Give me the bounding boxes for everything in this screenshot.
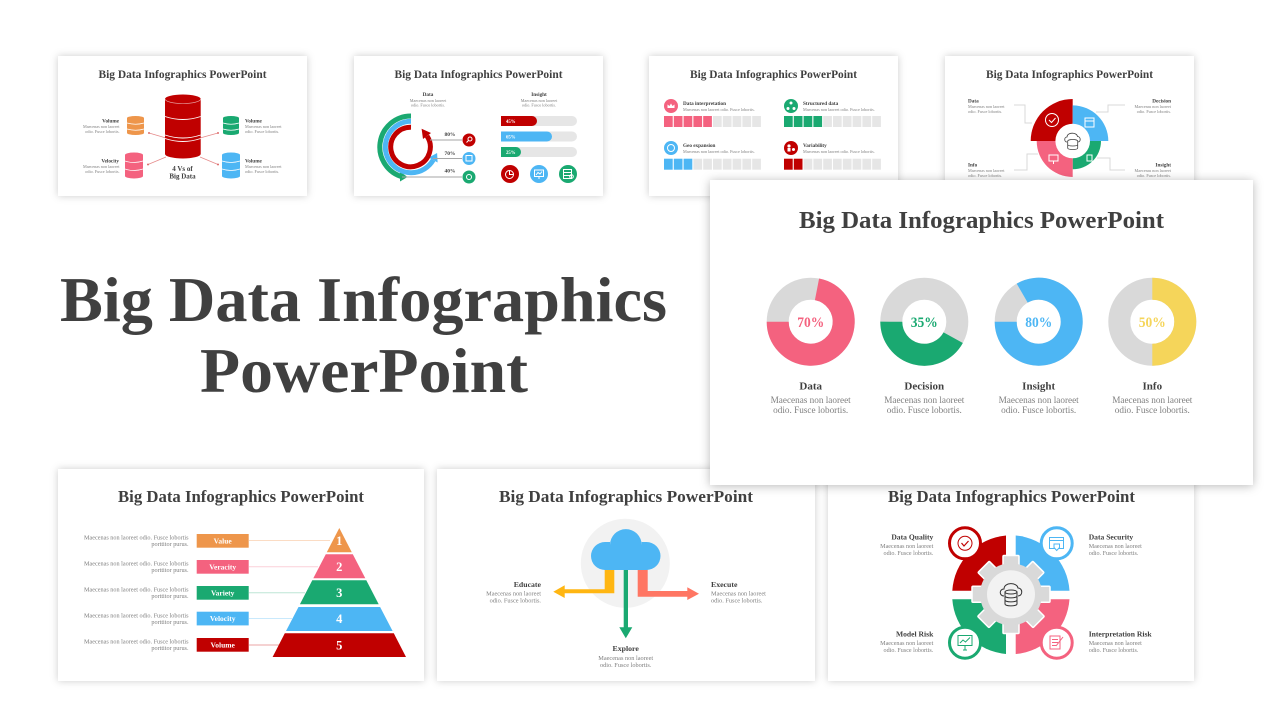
arrow: explore: [619, 569, 632, 638]
label: info: Info: [1143, 380, 1163, 392]
donut: data 70%: 70%: [797, 315, 824, 331]
block item: structured data: [784, 99, 881, 127]
data heading: Maecenas non laoreet: [410, 98, 447, 103]
label: decision: odio. Fusce lobortis.: [887, 405, 962, 415]
insight heading: Insight: [531, 92, 547, 98]
label: model risk: Maecenas non laoreet: [880, 641, 934, 647]
gear with data icon: [972, 556, 1050, 634]
percent labels: [444, 132, 456, 174]
label: info: odio. Fusce lobortis.: [968, 173, 1002, 178]
label: decision: [1134, 98, 1172, 114]
ring chart arrows: [380, 116, 462, 182]
icon: window circle: [462, 152, 476, 165]
block item: variability: [784, 141, 881, 170]
icon: cloud: [591, 529, 660, 570]
label: info: [1112, 380, 1193, 415]
label: volume right bottom: odio. Fusce lobortis.: [245, 169, 279, 174]
green small cylinder: [223, 116, 239, 135]
pyramid label chips: Veracity: [209, 562, 236, 572]
label: volume left: odio. Fusce lobortis.: [85, 129, 120, 134]
blue small cylinder: [222, 152, 240, 178]
panel title: gear: Big Data Infographics PowerPoint: [888, 487, 1136, 506]
donut: info 50%: [1119, 289, 1185, 355]
label: explore: [598, 644, 653, 669]
pyramid: 5: [336, 639, 342, 653]
label: info: Maecenas non laoreet: [968, 168, 1005, 173]
insight heading: Maecenas non laoreet: [521, 98, 558, 103]
icon: search circle: [462, 134, 476, 146]
pyramid: 1: [336, 534, 342, 548]
data heading: odio. Fusce lobortis.: [411, 102, 445, 108]
label: info: [968, 162, 1005, 178]
donut: data 70%: [778, 289, 844, 355]
icon: security window: [1041, 528, 1072, 559]
label: info: odio. Fusce lobortis.: [1115, 405, 1190, 415]
pyramid: 3: [336, 586, 342, 600]
data heading: [410, 92, 447, 108]
pyramid label chips: Value: [214, 536, 232, 546]
label: interpretation risk: [1089, 630, 1152, 654]
label: insight: [1134, 162, 1172, 178]
label: volume left: Maecenas non laoreet: [83, 124, 120, 129]
label: educate: Educate: [514, 580, 542, 589]
quadrant: red: [952, 536, 1006, 591]
label: interpretation risk: odio. Fusce lobortis.: [1089, 648, 1139, 654]
panel title: 4 Vs: Big Data Infographics PowerPoint: [98, 69, 267, 81]
panel title: blocks: Big Data Infographics PowerPoint: [690, 69, 857, 81]
pyramid descriptions: Maecenas non laoreet odio. Fusce lobortis: [84, 638, 189, 646]
label: volume right bottom: Volume: [245, 158, 263, 164]
label: data: Data: [799, 380, 823, 392]
icon: interpretation document: [1041, 627, 1072, 658]
label: execute: [711, 580, 766, 604]
label: velocity: Maecenas non laoreet: [83, 164, 120, 169]
label: explore: Explore: [613, 644, 639, 653]
panel: gear quadrants: [828, 469, 1194, 681]
donut: decision 35%: 35%: [911, 315, 938, 331]
label: insight: [999, 380, 1079, 415]
label: decision: Decision: [904, 380, 944, 392]
insight heading: odio. Fusce lobortis.: [522, 102, 556, 108]
label: educate: Maecenas non laoreet: [486, 590, 541, 598]
label: data: odio. Fusce lobortis.: [968, 109, 1002, 114]
icon: data circle: [462, 170, 476, 184]
pyramid descriptions: Maecenas non laoreet odio. Fusce lobortis: [84, 560, 189, 568]
panel: rings and bars: [354, 56, 603, 196]
pyramid label chips: Velocity: [210, 614, 236, 623]
quadrant wheel: [1031, 99, 1108, 177]
label: model risk: [880, 630, 934, 654]
orange small cylinder: [127, 116, 144, 135]
arrow: educate: [553, 569, 614, 598]
pyramid descriptions: porttitor purus.: [151, 645, 189, 652]
panel title: pyramid: Big Data Infographics PowerPoint: [118, 487, 365, 506]
label: insight: Maecenas non laoreet: [1134, 168, 1172, 173]
label: decision: Decision: [1152, 98, 1171, 104]
label: volume right bottom: Maecenas non laoreet: [245, 164, 282, 169]
label: data: Data: [968, 98, 979, 104]
main title: [60, 264, 667, 406]
panel: cloud arrows: [437, 469, 815, 681]
label: execute: Maecenas non laoreet: [711, 590, 766, 598]
icon: pie: [501, 165, 519, 183]
block item: geo expansion: [664, 141, 761, 170]
bar chart: [501, 116, 577, 157]
big database cylinder: [165, 94, 201, 158]
label: explore: Maecenas non laoreet: [598, 655, 653, 662]
label: volume right bottom: [245, 158, 282, 174]
pyramid: 4: [336, 612, 343, 626]
block item: geo expansion: Maecenas non laoreet odio. Fusce lobortis.: [683, 149, 755, 154]
icon: database sheet: [559, 165, 577, 183]
label: info: Info: [968, 162, 978, 168]
label: insight: odio. Fusce lobortis.: [1001, 405, 1076, 415]
label: data security: Maecenas non laoreet: [1089, 544, 1142, 550]
pyramid descriptions: porttitor purus.: [151, 593, 189, 600]
panel: progress blocks: [649, 56, 898, 196]
label: insight: Insight: [1022, 380, 1056, 392]
label: data quality: odio. Fusce lobortis.: [884, 551, 934, 557]
pyramid descriptions: Maecenas non laoreet odio. Fusce lobortis: [84, 534, 189, 542]
percent labels: 70%: [444, 151, 456, 157]
label: data security: odio. Fusce lobortis.: [1089, 551, 1139, 557]
label: execute: odio. Fusce lobortis.: [711, 598, 763, 604]
panel: donut charts: [710, 180, 1253, 485]
block item: data interpretation: Data interpretation: [683, 101, 726, 107]
label: data: Maecenas non laoreet: [771, 395, 851, 405]
pyramid label chips: Variety: [211, 588, 235, 598]
label: execute: Execute: [711, 580, 738, 589]
label: educate: [486, 580, 542, 604]
block item: structured data: Structured data: [803, 101, 839, 107]
pyramid label chips: [197, 534, 249, 652]
label: velocity: odio. Fusce lobortis.: [85, 169, 120, 174]
pink small cylinder: [125, 152, 143, 178]
pyramid descriptions: porttitor purus.: [151, 567, 189, 574]
pyramid descriptions: Maecenas non laoreet odio. Fusce lobortis: [84, 612, 189, 620]
block item: structured data: Maecenas non laoreet odio. Fusce lobortis.: [803, 107, 875, 112]
label: volume right top: Maecenas non laoreet: [245, 124, 282, 129]
label: decision: Maecenas non laoreet: [1134, 104, 1172, 109]
center label: 4 Vs of: [172, 165, 193, 173]
main title: Big Data Infographics: [60, 264, 667, 335]
label: interpretation risk: Interpretation Risk: [1089, 630, 1152, 638]
pyramid descriptions: Maecenas non laoreet odio. Fusce lobortis: [84, 586, 189, 594]
quadrant: pink: [1016, 599, 1070, 654]
panel title: donuts: Big Data Infographics PowerPoint: [799, 208, 1164, 234]
panel: pyramid: [58, 469, 424, 681]
block item: variability: Maecenas non laoreet odio. Fusce lobortis.: [803, 149, 875, 154]
panel title: rings: Big Data Infographics PowerPoint: [394, 69, 563, 81]
percent labels: 40%: [444, 168, 456, 174]
donut: insight 80%: [1006, 289, 1072, 355]
arrow: execute: [638, 569, 699, 600]
label: velocity: Velocity: [101, 158, 119, 164]
block item: geo expansion: Geo expansion: [683, 143, 716, 149]
icon: quality badge: [950, 528, 980, 559]
label: volume left: [83, 118, 120, 134]
label: volume right top: [245, 118, 282, 134]
bar chart: 25%: [506, 151, 516, 156]
label: interpretation risk: Maecenas non laoreet: [1089, 641, 1142, 647]
percent labels: 80%: [444, 132, 456, 138]
label: decision: Maecenas non laoreet: [884, 395, 965, 405]
label: decision: [884, 380, 965, 415]
icon: model chart board: [950, 627, 980, 658]
donut: decision 35%: [891, 289, 957, 355]
pyramid: [273, 528, 406, 657]
gray backdrop circle: [581, 519, 670, 608]
block item: variability: Variability: [803, 143, 827, 149]
label: insight: odio. Fusce lobortis.: [1137, 173, 1171, 178]
pyramid: 2: [336, 560, 342, 574]
main title: PowerPoint: [200, 335, 529, 406]
pyramid label chips: Volume: [211, 640, 236, 650]
label: model risk: Model Risk: [896, 630, 934, 638]
panel title: cloud: Big Data Infographics PowerPoint: [499, 487, 754, 506]
pyramid descriptions: porttitor purus.: [151, 619, 189, 626]
label: data: [771, 380, 851, 415]
panel: quadrant wheel: [945, 56, 1194, 196]
center label: Big Data: [169, 172, 196, 180]
bar chart: 45%: [506, 120, 516, 125]
label: insight: Maecenas non laoreet: [999, 395, 1079, 405]
label: volume left: Volume: [102, 118, 120, 124]
quadrant: green: [952, 599, 1006, 654]
insight heading: [521, 92, 558, 108]
label: data quality: Data Quality: [891, 532, 933, 542]
center label: [169, 165, 196, 180]
block item: data interpretation: Maecenas non laoreet odio. Fusce lobortis.: [683, 107, 755, 112]
pyramid descriptions: porttitor purus.: [151, 541, 189, 548]
label: info: Maecenas non laoreet: [1112, 395, 1193, 405]
label: data: odio. Fusce lobortis.: [773, 405, 848, 415]
data heading: Data: [423, 92, 434, 98]
quadrant: blue: [1016, 536, 1070, 591]
donut: info 50%: 50%: [1139, 315, 1166, 331]
label: velocity: [83, 158, 120, 174]
connector lines: [1014, 105, 1125, 170]
pyramid descriptions: [84, 534, 189, 652]
label: insight: Insight: [1155, 162, 1171, 168]
label: data: [968, 98, 1005, 114]
label: decision: odio. Fusce lobortis.: [1137, 109, 1171, 114]
pyramid connector lines: [249, 540, 330, 645]
label: data quality: Maecenas non laoreet: [880, 544, 934, 550]
label: data: Maecenas non laoreet: [968, 104, 1005, 109]
label: volume right top: Volume: [245, 118, 263, 124]
donut: insight 80%: 80%: [1025, 315, 1052, 331]
label: data security: Data Security: [1089, 532, 1133, 542]
label: volume right top: odio. Fusce lobortis.: [245, 129, 279, 134]
connector lines: [147, 132, 219, 165]
label: data security: [1089, 532, 1142, 557]
label: model risk: odio. Fusce lobortis.: [884, 648, 934, 654]
panel: 4 Vs of big data: [58, 56, 307, 196]
block item: data interpretation: [664, 99, 761, 127]
label: educate: odio. Fusce lobortis.: [490, 598, 541, 604]
label: data quality: [880, 532, 934, 557]
label: explore: odio. Fusce lobortis.: [600, 662, 652, 669]
bar chart: 65%: [506, 135, 516, 140]
icon: monitor: [530, 165, 548, 183]
panel title: wheel: Big Data Infographics PowerPoint: [986, 69, 1153, 81]
